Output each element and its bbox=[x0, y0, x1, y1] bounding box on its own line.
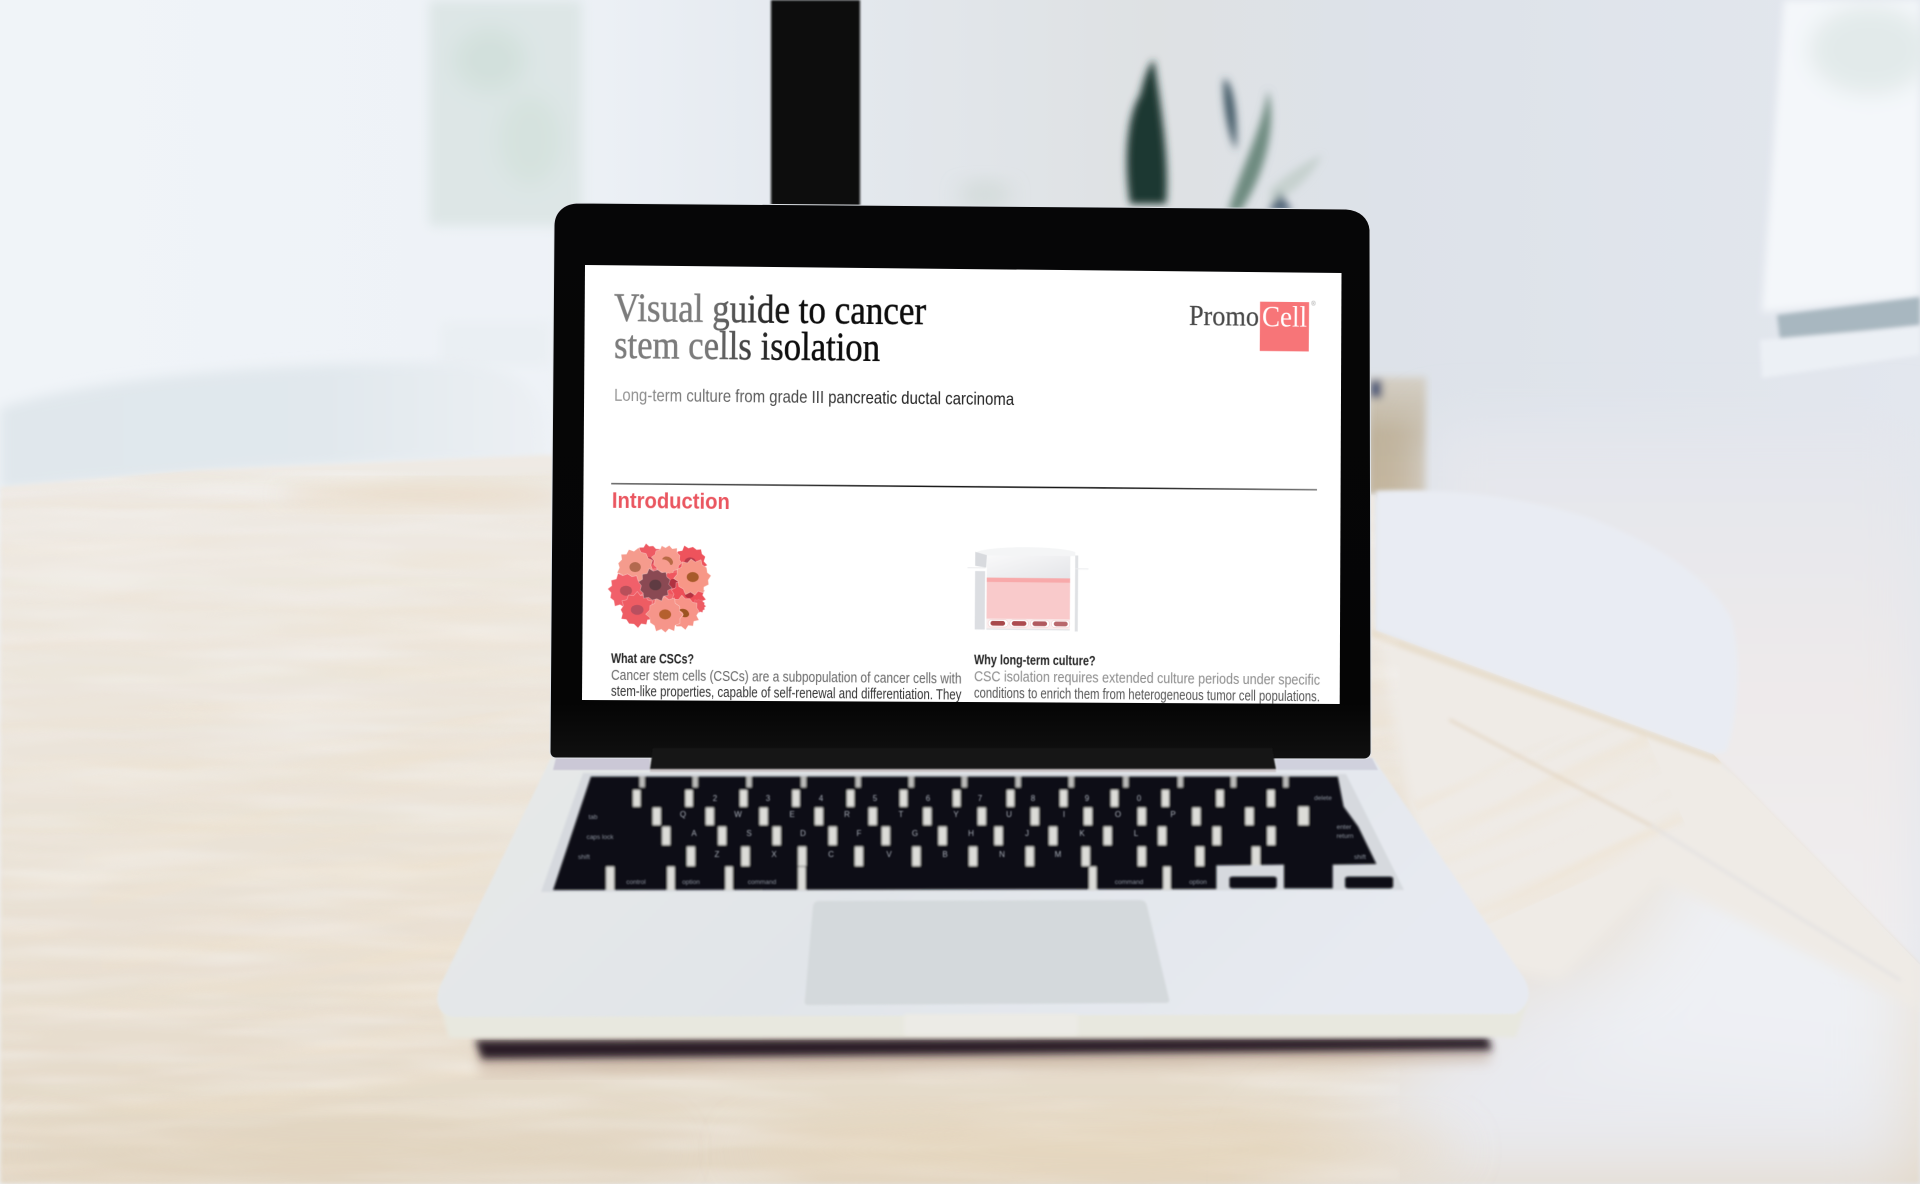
icon: culture flask with cells bbox=[967, 547, 1089, 632]
key legends: Y bbox=[953, 810, 959, 819]
screen white panel bbox=[582, 265, 1342, 704]
key legends: option bbox=[1189, 879, 1207, 886]
hinge strip bbox=[650, 748, 1276, 769]
section divider bbox=[611, 482, 1317, 491]
contact shadow under laptop bbox=[475, 1037, 1492, 1074]
icon: cancer stem cell cluster bbox=[608, 543, 712, 632]
wood grain bbox=[0, 470, 1920, 1184]
trackpad bbox=[805, 900, 1169, 1005]
key legends bbox=[578, 794, 1366, 886]
text block: What are CSCs?: Cancer stem cells (CSCs) are a subpopulation of cancer cells with bbox=[611, 668, 962, 688]
key legends: E bbox=[789, 810, 795, 819]
whitewashed table right side bbox=[1324, 882, 1920, 1184]
key legends: K bbox=[1079, 829, 1085, 838]
key legends: F bbox=[857, 829, 862, 838]
warm stain under laptop bbox=[740, 1116, 1460, 1184]
floor and right wall lower part bbox=[1430, 420, 1920, 980]
shift row key gaps bbox=[687, 847, 1260, 866]
title bbox=[614, 293, 926, 362]
key legends: P bbox=[1170, 810, 1176, 819]
key legends: A bbox=[691, 829, 697, 838]
black pole bbox=[771, 0, 860, 210]
screen content: infographic page bbox=[605, 285, 1323, 708]
left chair bbox=[0, 362, 548, 490]
key legends: N bbox=[999, 850, 1005, 859]
key legends: V bbox=[886, 850, 892, 859]
key legends: L bbox=[1134, 829, 1139, 838]
key legends: U bbox=[1006, 810, 1012, 819]
bottom row key gaps bbox=[606, 867, 1171, 890]
number row key gaps bbox=[633, 790, 1275, 807]
key legends: D bbox=[800, 829, 806, 838]
PromoCell logo bbox=[1189, 299, 1316, 352]
key legends: H bbox=[968, 829, 974, 838]
key legends: caps lock bbox=[586, 834, 614, 841]
key legends: return bbox=[1337, 833, 1354, 840]
right chair bbox=[1376, 490, 1738, 754]
brown cabinet behind laptop bbox=[1368, 377, 1426, 495]
window on right wall bbox=[1762, 0, 1920, 312]
key legends: G bbox=[912, 829, 918, 838]
key legends: shift bbox=[578, 854, 590, 861]
text block: Why long-term culture?: CSC isolation requires extended culture periods under specific bbox=[974, 669, 1320, 689]
PromoCell logo: Promo bbox=[1189, 300, 1259, 333]
text block: Why long-term culture?: conditions to enrich them from heterogeneous tumor cell populations. bbox=[974, 686, 1320, 705]
text block: What are CSCs?: What are CSCs? bbox=[611, 651, 694, 667]
key legends: command bbox=[1115, 879, 1144, 886]
key legends: 4 bbox=[819, 794, 824, 803]
key legends: 8 bbox=[1031, 794, 1036, 803]
window sill bbox=[1760, 297, 1920, 378]
text block: What are CSCs?: stem-like properties, capable of self-renewal and differentiation. They bbox=[611, 684, 962, 704]
PromoCell logo: Cell bbox=[1262, 300, 1307, 333]
key legends: Z bbox=[715, 850, 720, 859]
key legends: C bbox=[828, 850, 834, 859]
key legends: command bbox=[748, 879, 777, 886]
key legends: delete bbox=[1314, 795, 1332, 802]
key legends: M bbox=[1055, 850, 1062, 859]
laptop base front lip bbox=[440, 1000, 1528, 1038]
laptop base deck bbox=[437, 758, 1529, 1017]
key legends: 9 bbox=[1085, 794, 1090, 803]
home row key gaps bbox=[662, 827, 1275, 845]
key legends: J bbox=[1025, 829, 1029, 838]
PromoCell logo: ® bbox=[1311, 301, 1316, 308]
text block: What are CSCs? bbox=[611, 651, 962, 704]
key legends: Q bbox=[680, 810, 686, 819]
window on left wall bbox=[429, 0, 582, 226]
key legends: R bbox=[844, 810, 850, 819]
front notch bbox=[904, 1014, 1078, 1035]
key legends: T bbox=[899, 810, 904, 819]
section heading: Introduction: Introduction bbox=[612, 488, 730, 514]
key legends: W bbox=[734, 810, 742, 819]
keyboard tray bbox=[541, 773, 1404, 892]
key legends: control bbox=[626, 879, 646, 886]
key legends: 0 bbox=[1137, 794, 1142, 803]
key legends: 6 bbox=[926, 794, 931, 803]
wall shelf behind left chair bbox=[440, 322, 550, 366]
text block: Why long-term culture? bbox=[974, 652, 1320, 705]
key legends: 5 bbox=[873, 794, 878, 803]
table top bbox=[0, 455, 1920, 1184]
key legends: option bbox=[682, 879, 700, 886]
key legends: B bbox=[942, 850, 948, 859]
key legends: enter bbox=[1337, 824, 1352, 831]
key legends: tab bbox=[588, 814, 598, 821]
key legends: 2 bbox=[713, 794, 718, 803]
title: Visual guide to cancer bbox=[614, 285, 926, 333]
subtitle: Long-term culture from grade III pancreatic ductal carcinoma bbox=[614, 385, 1014, 409]
keyboard keys bbox=[553, 777, 1393, 890]
qwerty row key gaps bbox=[653, 807, 1309, 825]
laptop bbox=[437, 203, 1529, 1074]
key legends: O bbox=[1115, 810, 1121, 819]
laptop lid with black bezel bbox=[550, 203, 1371, 759]
key legends: S bbox=[746, 829, 752, 838]
key legends: 3 bbox=[766, 794, 771, 803]
key legends: 7 bbox=[978, 794, 983, 803]
plant leaves bbox=[959, 60, 1322, 212]
key legends: X bbox=[771, 850, 777, 859]
hinge shadow areas bbox=[553, 758, 1378, 772]
title: stem cells isolation bbox=[614, 322, 880, 370]
key legends: shift bbox=[1354, 854, 1366, 861]
function row key gaps bbox=[640, 777, 1288, 787]
key legends: I bbox=[1063, 810, 1065, 819]
text block: Why long-term culture?: Why long-term culture? bbox=[974, 652, 1096, 669]
